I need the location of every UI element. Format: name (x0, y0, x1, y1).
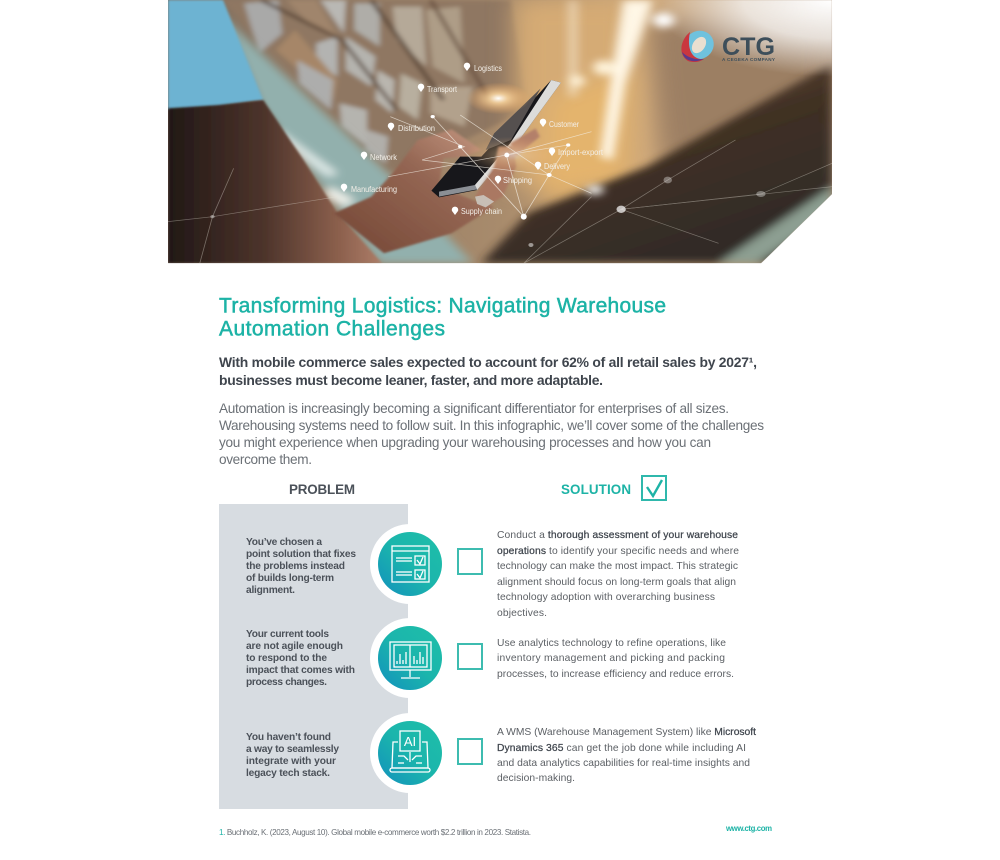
icon: checklist window (378, 532, 442, 596)
problem 3 text: a way to seamlessly (246, 744, 339, 755)
title (219, 294, 666, 340)
problem 2 text: process changes. (246, 677, 327, 688)
problem 1 text: point solution that fixes (246, 549, 356, 560)
heading: problem: PROBLEM (289, 482, 355, 497)
solution 3 text: Dynamics 365 can get the job done while including AI (497, 743, 746, 754)
title: Automation Challenges (219, 318, 445, 340)
footnote: 1. Buchholz, K. (2023, August 10). Global mobile e-commerce worth $2.2 trillion in 2023. Statista. (219, 828, 531, 837)
icon: AI laptop: AI (404, 734, 416, 749)
phone (431, 80, 561, 197)
problem 3 text: You haven’t found (246, 732, 331, 743)
hero photo: warehouse and phone (168, 0, 1000, 263)
problem 1 text: the problems instead (246, 561, 345, 572)
location labels: Logistics (474, 63, 502, 73)
lead paragraph: With mobile commerce sales expected to account for 62% of all retail sales by 2027¹, (219, 354, 757, 370)
solution 1 text: objectives. (497, 608, 547, 619)
glass rail (223, 17, 473, 263)
solution 3 text (497, 727, 756, 784)
solution 2 text (497, 638, 734, 680)
problem 1 text: of builds long-term (246, 573, 334, 584)
CTG logo: CTG (722, 33, 775, 61)
problem 3 text: legacy tech stack. (246, 768, 330, 779)
problem 2 text: Your current tools (246, 629, 329, 640)
solution 3 text: and data analytics capabilities for real-time insights and (497, 758, 750, 769)
heading: solution with checkbox: SOLUTION (561, 482, 631, 497)
problem 2 text: impact that comes with (246, 665, 355, 676)
problem 3 text (246, 732, 339, 779)
location labels: Manufacturing (351, 184, 397, 194)
solution 1 text: technology adoption with overarching business (497, 592, 715, 603)
location labels: Shipping (503, 175, 532, 185)
location labels: Customer (549, 119, 579, 129)
sleeve (168, 0, 263, 110)
location labels: Import-export (558, 147, 604, 157)
lead paragraph (219, 354, 757, 388)
location labels: Delivery (544, 161, 571, 171)
solution 1 text: operations to identify your specific needs and where (497, 546, 739, 557)
hand palm (334, 129, 494, 253)
checkbox 3 (458, 739, 482, 764)
problem 2 text: are not agile enough (246, 641, 343, 652)
CTG logo: A CEGEKA COMPANY (722, 57, 775, 62)
lead paragraph: businesses must become leaner, faster, and more adaptable. (219, 372, 603, 388)
icon: AI laptop (378, 721, 442, 785)
checkbox 2 (458, 644, 482, 669)
intro paragraph: overcome them. (219, 452, 312, 467)
solution 2 text: inventory management and picking and packing (497, 653, 725, 664)
panel: problems (219, 504, 450, 809)
intro paragraph: Warehousing systems need to follow suit. In this infographic, we’ll cover some of the challenges (219, 418, 764, 433)
location labels: Distribution (398, 123, 435, 133)
location labels: Supply chain (461, 206, 502, 216)
title: Transforming Logistics: Navigating Warehouse (219, 294, 666, 318)
solution 2 text: Use analytics technology to refine operations, like (497, 638, 726, 649)
problem 1 text: You’ve chosen a (246, 537, 322, 548)
problem 1 text: alignment. (246, 585, 295, 596)
heading: solution with checkbox (561, 476, 666, 500)
intro paragraph: Automation is increasingly becoming a significant differentiator for enterprises of all sizes. (219, 401, 729, 416)
light streak (568, 0, 675, 195)
solution 3 text: A WMS (Warehouse Management System) like Microsoft (497, 727, 756, 738)
CTG logo (679, 25, 775, 65)
problem 1 text (246, 537, 356, 596)
problem 2 text: to respond to the (246, 653, 327, 664)
fingers (475, 146, 516, 207)
location labels (341, 63, 604, 216)
location labels: Transport (427, 84, 458, 94)
intro paragraph (219, 401, 764, 467)
solution 1 text: Conduct a thorough assessment of your warehouse (497, 530, 738, 541)
solution 1 text (497, 530, 739, 619)
arm (168, 100, 382, 263)
checkbox 1 (458, 549, 482, 574)
problem 2 text (246, 629, 355, 688)
warehouse box wall (223, 0, 528, 173)
solution 2 text: processes, to increase efficiency and reduce errors. (497, 669, 734, 680)
location labels: Network (370, 152, 398, 162)
icon: analytics monitor (378, 626, 442, 690)
solution 3 text: decision-making. (497, 773, 575, 784)
intro paragraph: you might experience when upgrading your warehousing processes and how you can (219, 435, 711, 450)
website: www.ctg.com (725, 824, 772, 833)
dark lower right (481, 63, 832, 263)
problem 3 text: integrate with your (246, 756, 336, 767)
solution 1 text: alignment should focus on long-term goals that align (497, 577, 736, 588)
warm light right side (515, 0, 832, 207)
network lines (388, 115, 592, 217)
solution 1 text: technology can make the most impact. This strategic (497, 561, 738, 572)
